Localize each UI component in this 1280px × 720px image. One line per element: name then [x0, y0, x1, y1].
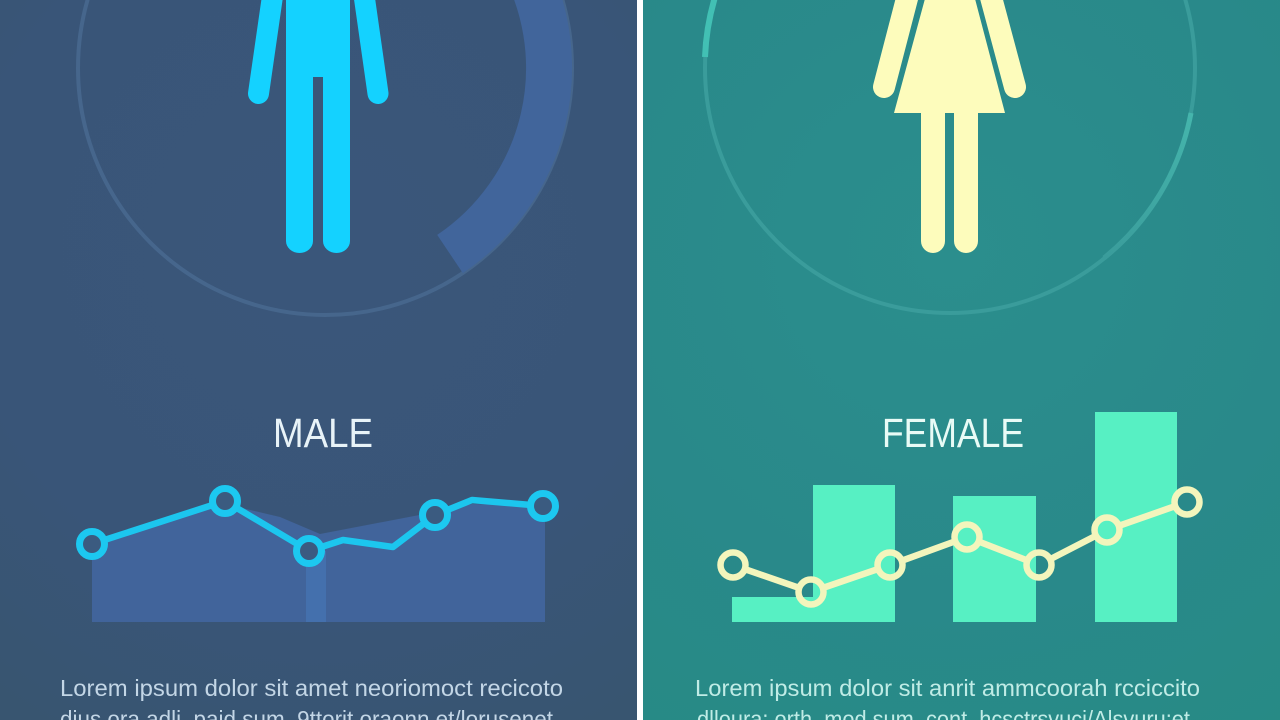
- data points: [80, 488, 556, 564]
- icon: female figure: [884, 0, 1015, 253]
- line series: [733, 502, 1187, 592]
- panel: female: [643, 0, 1280, 720]
- text block: male description: [60, 675, 563, 720]
- area series: [92, 504, 545, 622]
- heading: male: MALE: [273, 410, 373, 456]
- text block: male description: Lorem ipsum dolor sit amet neoriomoct recicoto: [60, 675, 563, 701]
- icon: male figure: [258, 0, 378, 253]
- divider: [637, 0, 643, 720]
- bars: [732, 412, 1177, 622]
- highlight column: [306, 551, 326, 622]
- progress ring: female: [705, 0, 1195, 313]
- panel background: female: [643, 0, 1280, 720]
- chart: male area and line: [80, 488, 556, 622]
- text block: female description: Lorem ipsum dolor sit anrit ammcoorah rcciccito: [695, 675, 1200, 701]
- line series: [92, 500, 543, 551]
- chart: female bars and line: [720, 412, 1200, 622]
- heading: female: FEMALE: [882, 410, 1024, 456]
- panel: male: [0, 0, 637, 720]
- progress ring: male: [78, 0, 572, 315]
- data points: [720, 490, 1200, 604]
- panel background: male: [0, 0, 637, 720]
- text block: female description: [695, 675, 1200, 720]
